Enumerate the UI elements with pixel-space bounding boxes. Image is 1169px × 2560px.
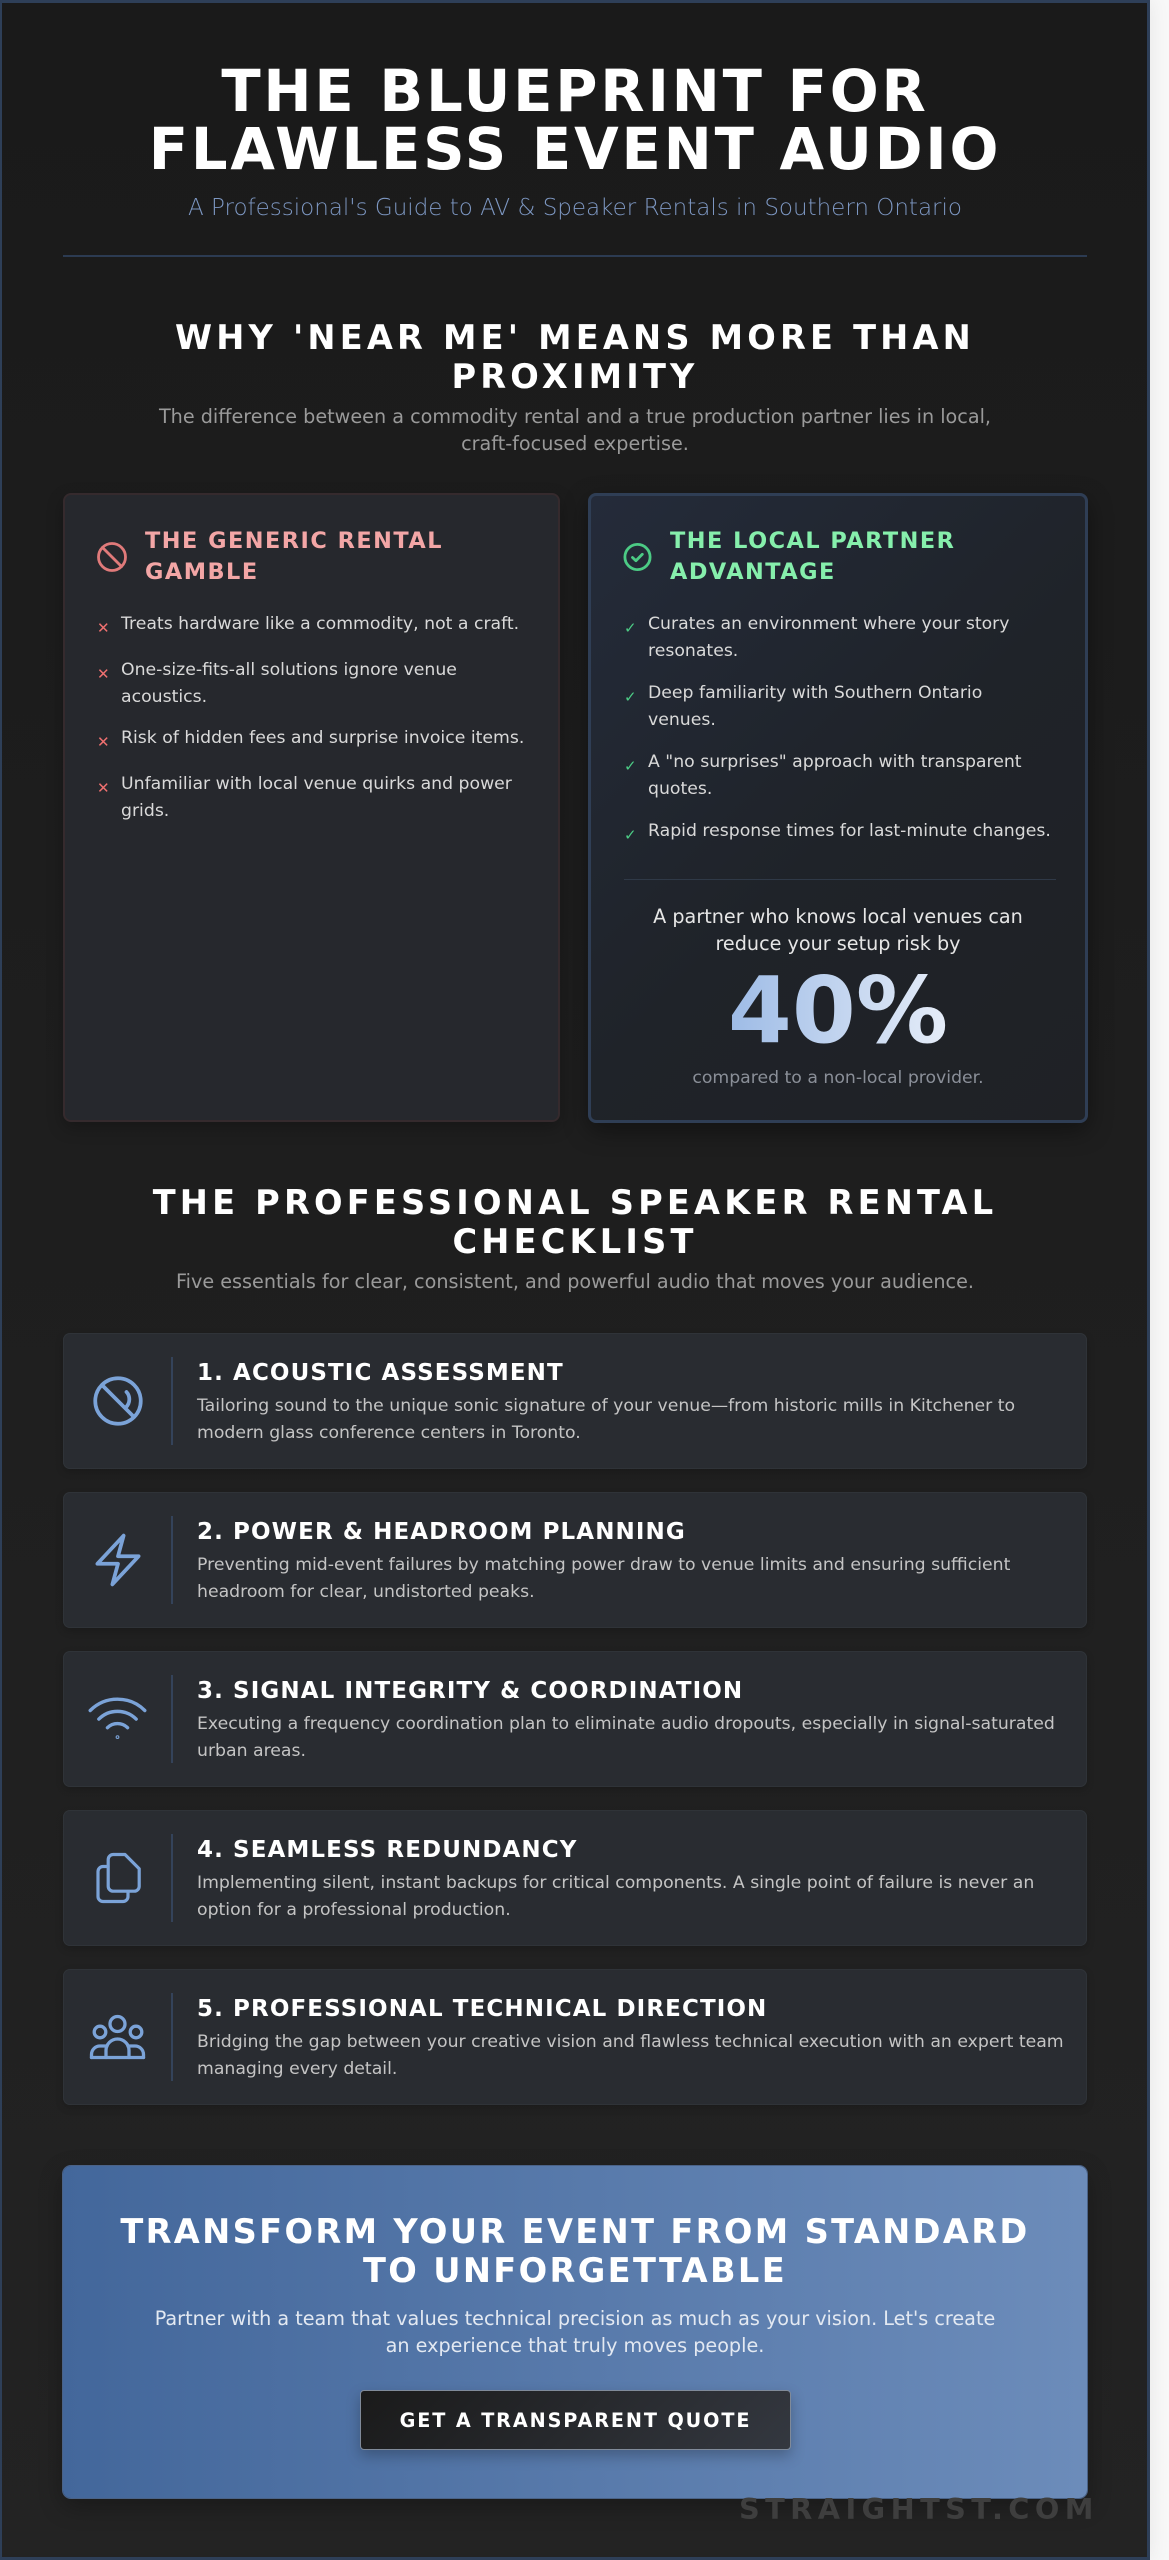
cta heading: TO UNFORGETTABLE (363, 2250, 787, 2290)
list of drawbacks: acoustics. (121, 687, 207, 707)
section heading: checklist (152, 1183, 997, 1292)
heading text: CHECKLIST (452, 1222, 698, 1260)
icon: check circle (624, 543, 652, 571)
list of drawbacks: ✕ (97, 619, 110, 637)
step description: Preventing mid-event failures by matching power draw to venue limits and ensuring sufficient (197, 1554, 1010, 1574)
callout footnote: compared to a non-local provider. (692, 1068, 984, 1088)
panel heading: ADVANTAGE (670, 558, 836, 584)
icon: muted ear (93, 1376, 143, 1426)
step description (197, 2032, 1064, 2078)
callout lead text (653, 905, 1023, 955)
statistic callout (653, 905, 1023, 1088)
step description: Tailoring sound to the unique sonic signature of your venue—from historic mills in Kitchener to (197, 1396, 1015, 1416)
list of drawbacks: ✕ (97, 779, 110, 797)
step 3: signal integrity (63, 1651, 1087, 1787)
heading text (175, 318, 975, 396)
step 4: seamless redundancy (63, 1810, 1087, 1946)
step title: 3. SIGNAL INTEGRITY & COORDINATION (197, 1678, 743, 1704)
icon: lightning bolt (96, 1534, 140, 1586)
icon: wifi signal (88, 1698, 146, 1739)
panel: generic rental gamble (63, 493, 560, 1122)
step description: Implementing silent, instant backups for critical components. A single point of failure is never an (197, 1872, 1034, 1892)
list of drawbacks: ✕ (97, 733, 110, 751)
cta heading (120, 2212, 1030, 2290)
cta paragraph: an experience that truly moves people. (386, 2334, 764, 2357)
list of advantages: ✓ (624, 688, 637, 706)
list of advantages: ✓ (624, 826, 637, 844)
step description (196, 1396, 1015, 1442)
step description: Executing a frequency coordination plan to eliminate audio dropouts, especially in signal-saturated (197, 1714, 1055, 1734)
list of advantages: ✓ (624, 619, 637, 637)
title (149, 58, 1001, 183)
step 1: acoustic assessment (63, 1333, 1087, 1469)
callout lead text: A partner who knows local venues can (653, 905, 1023, 928)
step description: Bridging the gap between your creative vision and flawless technical execution with an expert team (197, 2032, 1064, 2052)
heading text: THE PROFESSIONAL SPEAKER RENTAL (153, 1183, 997, 1222)
list of drawbacks: Treats hardware like a commodity, not a craft. (121, 614, 519, 634)
list of advantages: ✓ (624, 757, 637, 775)
panel heading: THE LOCAL PARTNER (670, 528, 955, 554)
icon: ban symbol (97, 542, 127, 572)
heading text: PROXIMITY (451, 356, 699, 396)
panel heading: GAMBLE (145, 558, 259, 584)
intro paragraph: Five essentials for clear, consistent, and powerful audio that moves your audience. (176, 1270, 974, 1292)
step title: 1. ACOUSTIC ASSESSMENT (197, 1360, 564, 1386)
list of advantages: resonates. (648, 641, 738, 661)
cta paragraph (155, 2307, 995, 2357)
list of advantages: quotes. (648, 779, 712, 799)
step description: option for a professional production. (197, 1900, 511, 1920)
step description: urban areas. (197, 1740, 306, 1760)
panel heading: THE GENERIC RENTAL (145, 528, 443, 554)
subtitle: A Professional's Guide to AV & Speaker Rentals in Southern Ontario (188, 195, 962, 221)
list of advantages: Curates an environment where your story (648, 614, 1009, 634)
list of drawbacks: ✕ (97, 665, 110, 683)
list of drawbacks: Risk of hidden fees and surprise invoice items. (121, 728, 524, 748)
intro paragraph (158, 404, 991, 454)
panel heading (145, 528, 443, 584)
step description (197, 1714, 1055, 1760)
list of advantages: venues. (648, 710, 716, 730)
step 2: power and headroom (63, 1492, 1087, 1628)
list of drawbacks: grids. (121, 801, 169, 821)
section heading: why near me (158, 318, 991, 454)
list of drawbacks: One-size-fits-all solutions ignore venue (121, 660, 457, 680)
list of drawbacks: Unfamiliar with local venue quirks and power (121, 774, 512, 794)
list of advantages: Rapid response times for last-minute changes. (648, 821, 1051, 841)
callout lead text: reduce your setup risk by (715, 932, 961, 955)
list of advantages (624, 614, 1051, 844)
step 5: technical direction (63, 1969, 1087, 2105)
title: THE BLUEPRINT FOR (221, 58, 929, 125)
header (63, 58, 1087, 257)
icon: duplicate documents (96, 1852, 141, 1904)
list of advantages: Deep familiarity with Southern Ontario (648, 683, 982, 703)
panel: local partner advantage (588, 493, 1088, 1123)
call to action panel (63, 2166, 1087, 2498)
cta heading: TRANSFORM YOUR EVENT FROM STANDARD (120, 2212, 1030, 2251)
icon: team of people (90, 2014, 146, 2060)
panel heading (670, 528, 955, 584)
step description (197, 1554, 1010, 1602)
big number 40%: 40% (728, 957, 948, 1064)
heading text: WHY 'NEAR ME' MEANS MORE THAN (175, 318, 975, 357)
step title: 4. SEAMLESS REDUNDANCY (197, 1837, 578, 1863)
intro paragraph: The difference between a commodity rental and a true production partner lies in local, (159, 404, 991, 428)
watermark: STRAIGHTST.COM (739, 2492, 1099, 2526)
step description: headroom for clear, undistorted peaks. (197, 1582, 535, 1602)
list of advantages: A "no surprises" approach with transparent (648, 752, 1022, 772)
cta paragraph: Partner with a team that values technical precision as much as your vision. Let's create (155, 2307, 995, 2330)
step title: 5. PROFESSIONAL TECHNICAL DIRECTION (197, 1996, 767, 2022)
heading text (152, 1183, 997, 1260)
step description: modern glass conference centers in Toronto. (197, 1422, 581, 1442)
cta button: GET A TRANSPARENT QUOTE (400, 2409, 751, 2432)
step description: managing every detail. (197, 2058, 397, 2078)
step description (197, 1872, 1034, 1920)
step title: 2. POWER & HEADROOM PLANNING (197, 1519, 686, 1545)
cta button (360, 2390, 791, 2450)
title: FLAWLESS EVENT AUDIO (149, 116, 1001, 183)
intro paragraph: craft-focused expertise. (461, 432, 689, 454)
list of drawbacks (97, 614, 524, 821)
